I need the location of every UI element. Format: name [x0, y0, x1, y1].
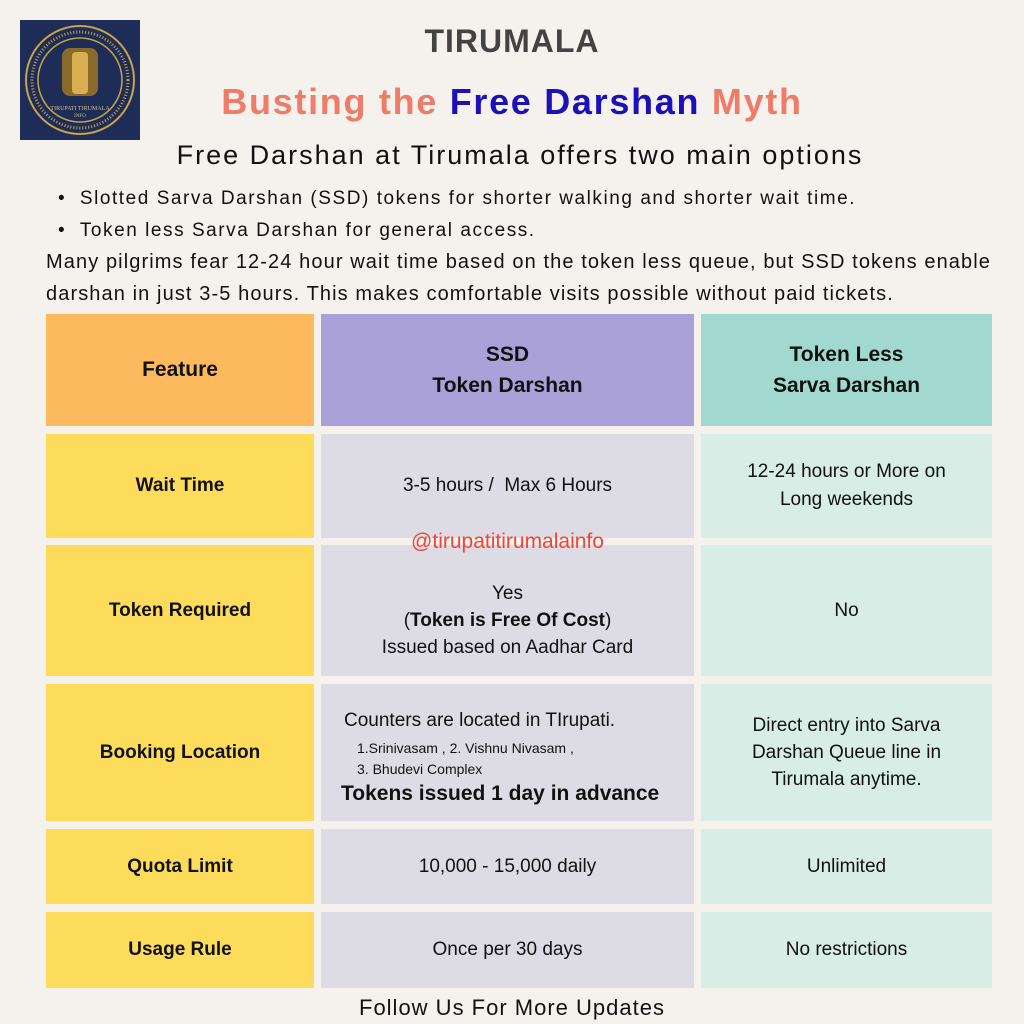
header: feature [46, 314, 314, 426]
row: usage: Usage Rule [128, 939, 232, 960]
paragraph: darshan in just 3-5 hours. This makes comfortable visits possible without paid tickets. [46, 283, 894, 305]
row: wait time: Wait Time [136, 475, 224, 496]
header: token less: Token Less [790, 343, 903, 366]
row: usage [46, 912, 314, 988]
paragraph [46, 251, 991, 305]
comparison table: 12-24 hours or More on [747, 461, 946, 482]
comparison table: Unlimited [807, 856, 886, 876]
paragraph: Many pilgrims fear 12-24 hour wait time based on the token less queue, but SSD tokens enable [46, 251, 991, 273]
comparison table: Darshan Queue line in [752, 742, 941, 763]
row: quota [46, 829, 314, 904]
comparison table: (Token is Free Of Cost) [404, 610, 611, 631]
bullet list: • Token less Sarva Darshan for general access. [58, 220, 536, 241]
header: SSD [321, 314, 694, 426]
row: wait time [46, 434, 314, 538]
header: token less: Sarva Darshan [773, 374, 920, 397]
header: token less [701, 314, 992, 426]
bullet list [58, 188, 856, 241]
logo: INFO [74, 114, 86, 119]
title: TIRUMALA [424, 23, 600, 59]
comparison table: Yes [492, 583, 523, 604]
watermark: @tirupatitirumalainfo [411, 530, 604, 553]
header: SSD: Token Darshan [432, 374, 583, 397]
header: SSD: SSD [486, 343, 529, 366]
comparison table: Once per 30 days [432, 939, 582, 960]
row: token required: Token Required [109, 600, 251, 620]
header: feature: Feature [142, 358, 218, 381]
logo [20, 20, 140, 140]
comparison table: No restrictions [786, 939, 907, 960]
bullet list: • Slotted Sarva Darshan (SSD) tokens for shorter walking and shorter wait time. [58, 188, 856, 209]
comparison table: 10,000 - 15,000 daily [419, 856, 596, 876]
row: token required [46, 545, 314, 676]
logo: TIRUPATI TIRUMALA [50, 106, 110, 112]
footer: Follow Us For More Updates [359, 995, 665, 1020]
comparison table: Counters are located in TIrupati. [344, 710, 615, 731]
comparison table: Direct entry into Sarva [752, 715, 940, 736]
comparison table: Tokens issued 1 day in advance [341, 782, 659, 805]
comparison table: Tirumala anytime. [771, 769, 922, 790]
row: quota: Quota Limit [127, 856, 233, 876]
comparison table: No [834, 600, 859, 620]
row: booking location: Booking Location [100, 742, 260, 762]
row: booking location [46, 684, 314, 821]
comparison table: 1.Srinivasam , 2. Vishnu Nivasam , [357, 740, 574, 756]
intro heading: Free Darshan at Tirumala offers two main options [177, 140, 863, 170]
comparison table: 3-5 hours / Max 6 Hours [403, 475, 612, 496]
subtitle headline: Busting the Free Darshan Myth [221, 81, 803, 122]
comparison table: 3. Bhudevi Complex [357, 761, 482, 777]
comparison table: Issued based on Aadhar Card [382, 637, 633, 658]
comparison table: Long weekends [780, 489, 913, 510]
